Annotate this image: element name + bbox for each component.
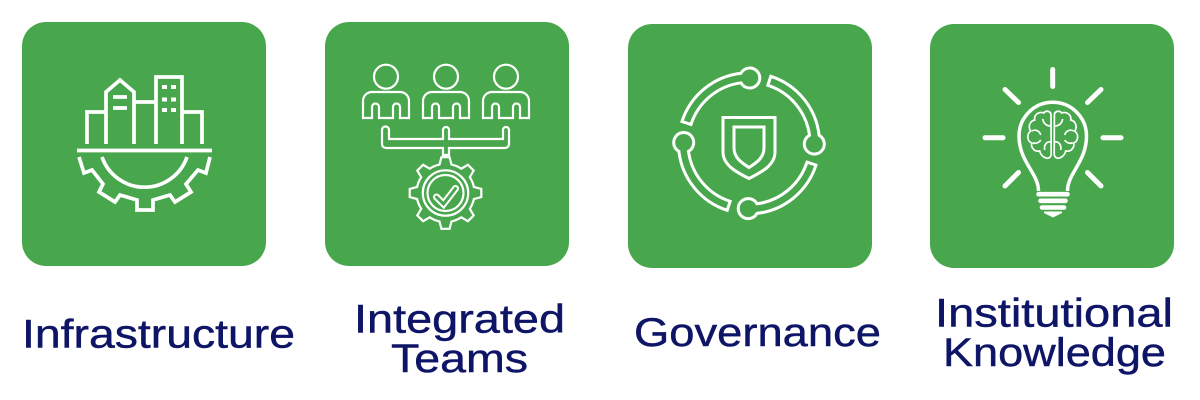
- tile: [628, 24, 872, 268]
- tile: [22, 22, 266, 266]
- label: Institutional Knowledge: Institutional: [935, 292, 1173, 336]
- panel: governance: [628, 24, 881, 355]
- label: Integrated Teams: [354, 298, 565, 381]
- label: Infrastructure: Infrastructure: [22, 312, 295, 356]
- panel: infrastructure: [22, 22, 295, 356]
- icon: light bulb with brain: [985, 70, 1121, 218]
- label: Institutional Knowledge: Knowledge: [943, 331, 1166, 375]
- label: Integrated Teams: Teams: [391, 337, 528, 381]
- icon: city on gear: [77, 77, 212, 210]
- label: Governance: Governance: [634, 311, 881, 355]
- panel: institutional knowledge: [930, 24, 1174, 375]
- icon: shield in ring: [674, 68, 824, 219]
- tile: [325, 22, 569, 266]
- label: Institutional Knowledge: [935, 292, 1173, 375]
- label: Integrated Teams: Integrated: [354, 298, 565, 342]
- icon: team and gear: [363, 65, 529, 229]
- tile: [930, 24, 1174, 268]
- panel: integrated teams: [325, 22, 569, 381]
